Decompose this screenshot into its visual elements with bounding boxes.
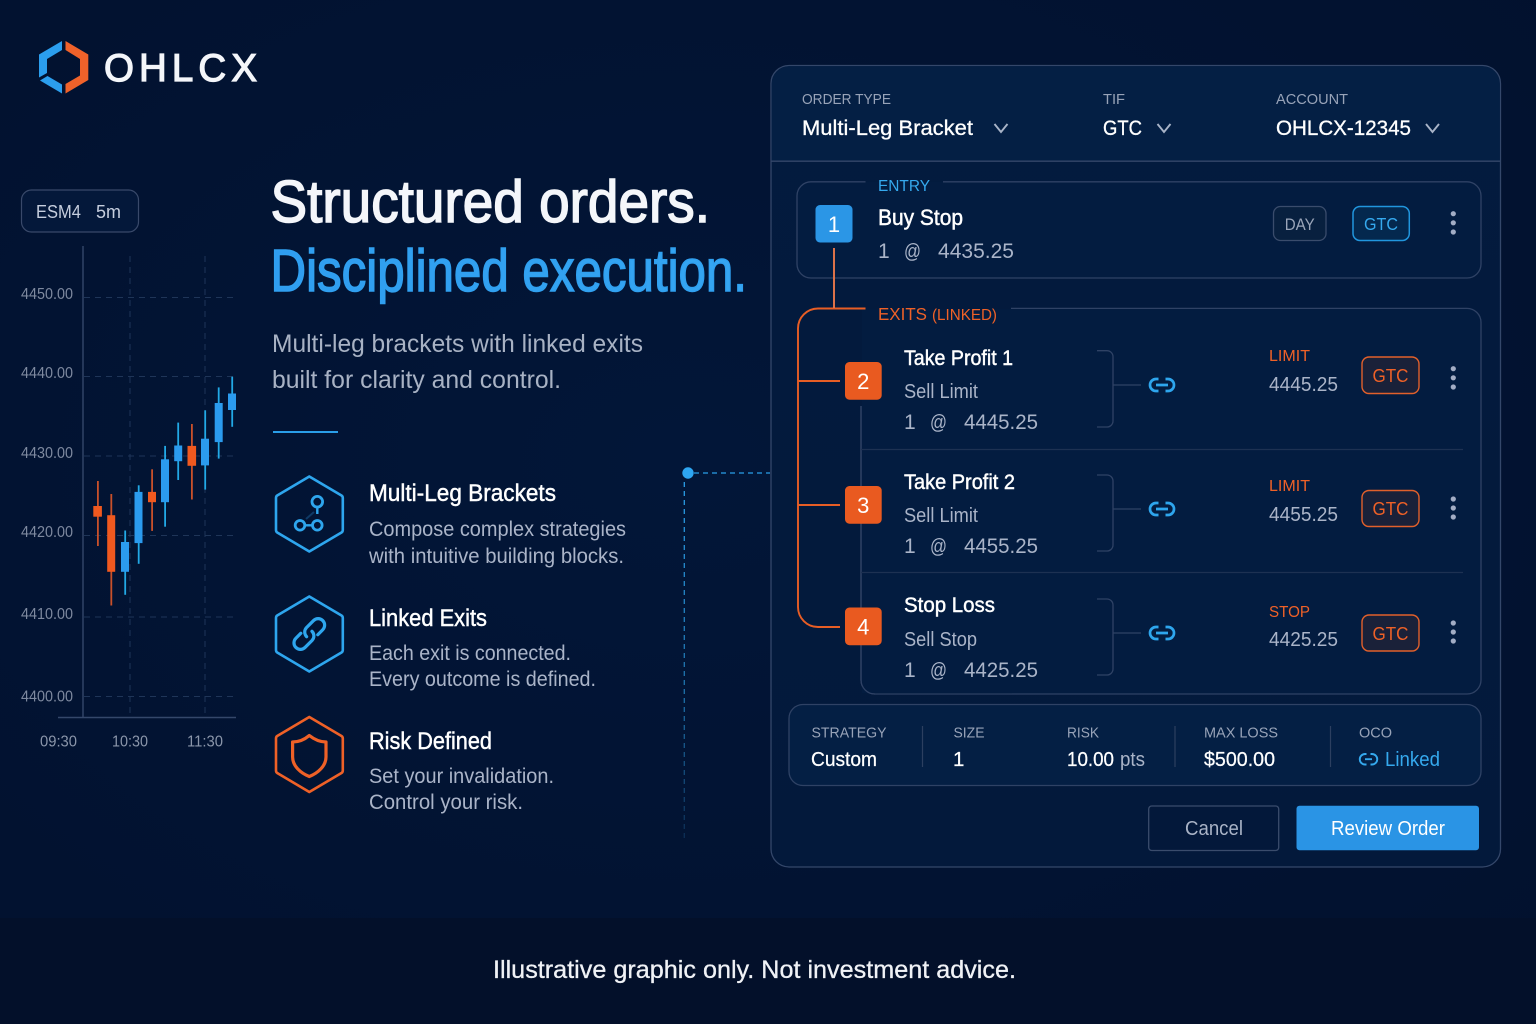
button: review order bbox=[1296, 806, 1479, 850]
chart: candlestick panel bbox=[21, 190, 236, 750]
summary bar: STRATEGY bbox=[812, 726, 887, 742]
leg: take profit 2: LIMIT bbox=[1269, 478, 1311, 495]
feature: Multi-Leg Brackets bbox=[276, 476, 626, 568]
section: entry: Buy Stop bbox=[878, 205, 963, 230]
text: Linked Exits bbox=[369, 605, 596, 691]
leg: stop loss: Sell Stop bbox=[904, 629, 977, 651]
leg: take profit 1: LIMIT bbox=[1269, 348, 1311, 365]
summary bar: 10.00 bbox=[1067, 748, 1114, 771]
summary bar: Custom bbox=[811, 748, 877, 771]
footer bbox=[0, 918, 1536, 1024]
badge 3 bbox=[845, 486, 882, 524]
summary bar: $500.00 bbox=[1204, 748, 1275, 771]
text: Multi-Leg Brackets bbox=[368, 480, 626, 568]
summary bar: 1 bbox=[953, 748, 964, 771]
panel header: TIF bbox=[1103, 92, 1125, 108]
text: Risk Defined bbox=[369, 728, 554, 814]
leg: take profit 1 bbox=[845, 346, 1456, 434]
section: entry: @ bbox=[904, 241, 921, 263]
feature: Linked Exits bbox=[276, 596, 596, 691]
summary bar: MAX LOSS bbox=[1204, 726, 1278, 742]
icon: shield hexagon bbox=[276, 717, 343, 792]
subtitle: built for clarity and control. bbox=[272, 366, 561, 394]
heading: exits linked: EXITS bbox=[878, 304, 927, 324]
text: Risk Defined: Control your risk. bbox=[369, 791, 523, 814]
summary bar: pts bbox=[1120, 749, 1145, 771]
text: Linked Exits: Linked Exits bbox=[369, 605, 487, 632]
tag: GTC orange: GTC bbox=[1372, 623, 1408, 644]
candles bbox=[93, 377, 236, 606]
leg: take profit 1: Take Profit 1 bbox=[904, 346, 1013, 370]
section: exits bbox=[798, 248, 1481, 694]
tag: DAY: DAY bbox=[1285, 215, 1315, 234]
x axis labels bbox=[40, 734, 223, 750]
summary bar: OCO bbox=[1359, 726, 1392, 742]
badge 2 bbox=[845, 362, 882, 400]
menu dots bbox=[1451, 366, 1456, 390]
y axis labels: 4420.00 bbox=[21, 524, 73, 541]
section: entry bbox=[797, 178, 1481, 278]
leg: stop loss: STOP bbox=[1269, 604, 1310, 621]
leg: take profit 2: @ bbox=[930, 536, 947, 558]
x axis labels: 10:30 bbox=[112, 734, 148, 750]
icon: logo hexagon bbox=[39, 41, 88, 94]
text: Risk Defined: Set your invalidation. bbox=[369, 765, 554, 788]
badge 4: 4 bbox=[857, 614, 869, 640]
text: Multi-Leg Brackets: Multi-Leg Brackets bbox=[369, 480, 556, 507]
tag: DAY bbox=[1274, 206, 1326, 240]
y axis labels: 4410.00 bbox=[21, 606, 73, 623]
panel header bbox=[771, 66, 1500, 161]
section: entry: 1 bbox=[878, 240, 890, 263]
connector: features to order panel bbox=[682, 467, 770, 840]
exits frame bbox=[861, 308, 1481, 694]
summary bar bbox=[789, 704, 1481, 786]
leg: stop loss: 4425.25 bbox=[1269, 629, 1338, 651]
icon: link bbox=[1150, 379, 1174, 391]
heading: exits linked: (LINKED) bbox=[932, 307, 997, 324]
y axis labels: 4440.00 bbox=[21, 365, 73, 382]
text: Linked Exits: Every outcome is defined. bbox=[369, 668, 596, 691]
leg: take profit 2: Take Profit 2 bbox=[904, 470, 1015, 494]
orange bracket connector bbox=[798, 248, 866, 627]
leg: take profit 2: 1 bbox=[904, 535, 916, 558]
section: entry: ENTRY bbox=[878, 178, 930, 195]
leg: stop loss: 1 bbox=[904, 659, 916, 682]
title bbox=[270, 169, 747, 304]
tag: GTC orange bbox=[1362, 357, 1419, 394]
button: cancel bbox=[1149, 806, 1279, 850]
title: Disciplined execution. bbox=[270, 238, 747, 304]
feature: Risk Defined bbox=[276, 717, 554, 814]
footer: Illustrative graphic only. Not investment advice. bbox=[493, 956, 1016, 984]
menu dots bbox=[1451, 620, 1456, 644]
badge 4 bbox=[845, 608, 882, 645]
menu dots bbox=[1451, 496, 1456, 520]
x axis labels: 11:30 bbox=[187, 734, 223, 750]
chart axes bbox=[58, 246, 236, 718]
badge 2: 2 bbox=[857, 369, 869, 394]
icon: brackets hexagon bbox=[276, 476, 343, 552]
tag: GTC orange bbox=[1362, 490, 1419, 526]
leg: take profit 2 bbox=[845, 470, 1456, 558]
symbol pill: 5m bbox=[96, 202, 121, 222]
title: Structured orders. bbox=[270, 169, 710, 235]
leg: take profit 2: 4455.25 bbox=[1269, 504, 1338, 526]
icon: OCO link bbox=[1360, 754, 1377, 764]
panel header: ORDER TYPE bbox=[802, 92, 891, 108]
icon: chain hexagon bbox=[276, 596, 343, 672]
tag: GTC: GTC bbox=[1364, 214, 1398, 234]
leg: take profit 1: Sell Limit bbox=[904, 381, 978, 403]
subtitle: Multi-leg brackets with linked exits bbox=[272, 330, 643, 358]
badge 1: 1 bbox=[828, 212, 840, 237]
badge 1 bbox=[816, 205, 852, 242]
section: entry: 4435.25 bbox=[938, 240, 1014, 263]
heading: exits linked bbox=[878, 304, 997, 324]
text: Linked Exits: Each exit is connected. bbox=[369, 642, 571, 665]
x axis labels: 09:30 bbox=[40, 734, 77, 750]
leg: stop loss bbox=[845, 593, 1456, 682]
panel header: GTC bbox=[1103, 116, 1142, 140]
leg: take profit 2: Sell Limit bbox=[904, 505, 978, 527]
icon: link bbox=[1150, 503, 1174, 515]
symbol pill bbox=[22, 190, 138, 232]
summary bar: SIZE bbox=[954, 726, 985, 742]
menu dots bbox=[1451, 211, 1456, 235]
panel header: ACCOUNT bbox=[1276, 92, 1348, 108]
panel header: Multi-Leg Bracket bbox=[802, 116, 973, 140]
leg: take profit 1: @ bbox=[930, 412, 947, 434]
y axis labels: 4450.00 bbox=[21, 286, 73, 303]
text: Multi-Leg Brackets: Compose complex strategies bbox=[369, 518, 626, 541]
summary bar: RISK bbox=[1067, 726, 1099, 742]
y axis labels: 4400.00 bbox=[21, 688, 73, 706]
logo: OHLCX bbox=[39, 41, 257, 94]
tag: GTC orange bbox=[1362, 615, 1419, 651]
subtitle bbox=[272, 330, 643, 394]
leg: take profit 1: 4445.25 bbox=[1269, 374, 1338, 396]
badge 3: 3 bbox=[857, 493, 869, 518]
logo wordmark: OHLCX bbox=[104, 47, 257, 90]
leg: stop loss: 4425.25 bbox=[964, 659, 1038, 682]
leg: take profit 2: 4455.25 bbox=[964, 535, 1038, 558]
text: Risk Defined: Risk Defined bbox=[369, 728, 492, 755]
icon: link bbox=[1150, 627, 1174, 639]
button: cancel: Cancel bbox=[1185, 818, 1243, 840]
text: Multi-Leg Brackets: with intuitive building blocks. bbox=[368, 545, 624, 568]
summary bar: Linked bbox=[1385, 748, 1440, 771]
leg: take profit 1: 1 bbox=[904, 411, 916, 434]
panel header: OHLCX-12345 bbox=[1276, 116, 1411, 140]
tag: GTC orange: GTC bbox=[1372, 498, 1408, 519]
leg: stop loss: Stop Loss bbox=[904, 593, 995, 617]
y axis labels bbox=[21, 286, 73, 706]
y axis labels: 4430.00 bbox=[21, 445, 73, 462]
leg: take profit 1: 4445.25 bbox=[964, 411, 1038, 434]
button: review order: Review Order bbox=[1331, 818, 1445, 840]
leg: stop loss: @ bbox=[930, 660, 947, 682]
tag: GTC bbox=[1353, 206, 1409, 240]
panel: order ticket bbox=[771, 66, 1500, 867]
symbol pill: ESM4 bbox=[36, 202, 81, 222]
tag: GTC orange: GTC bbox=[1372, 365, 1408, 386]
